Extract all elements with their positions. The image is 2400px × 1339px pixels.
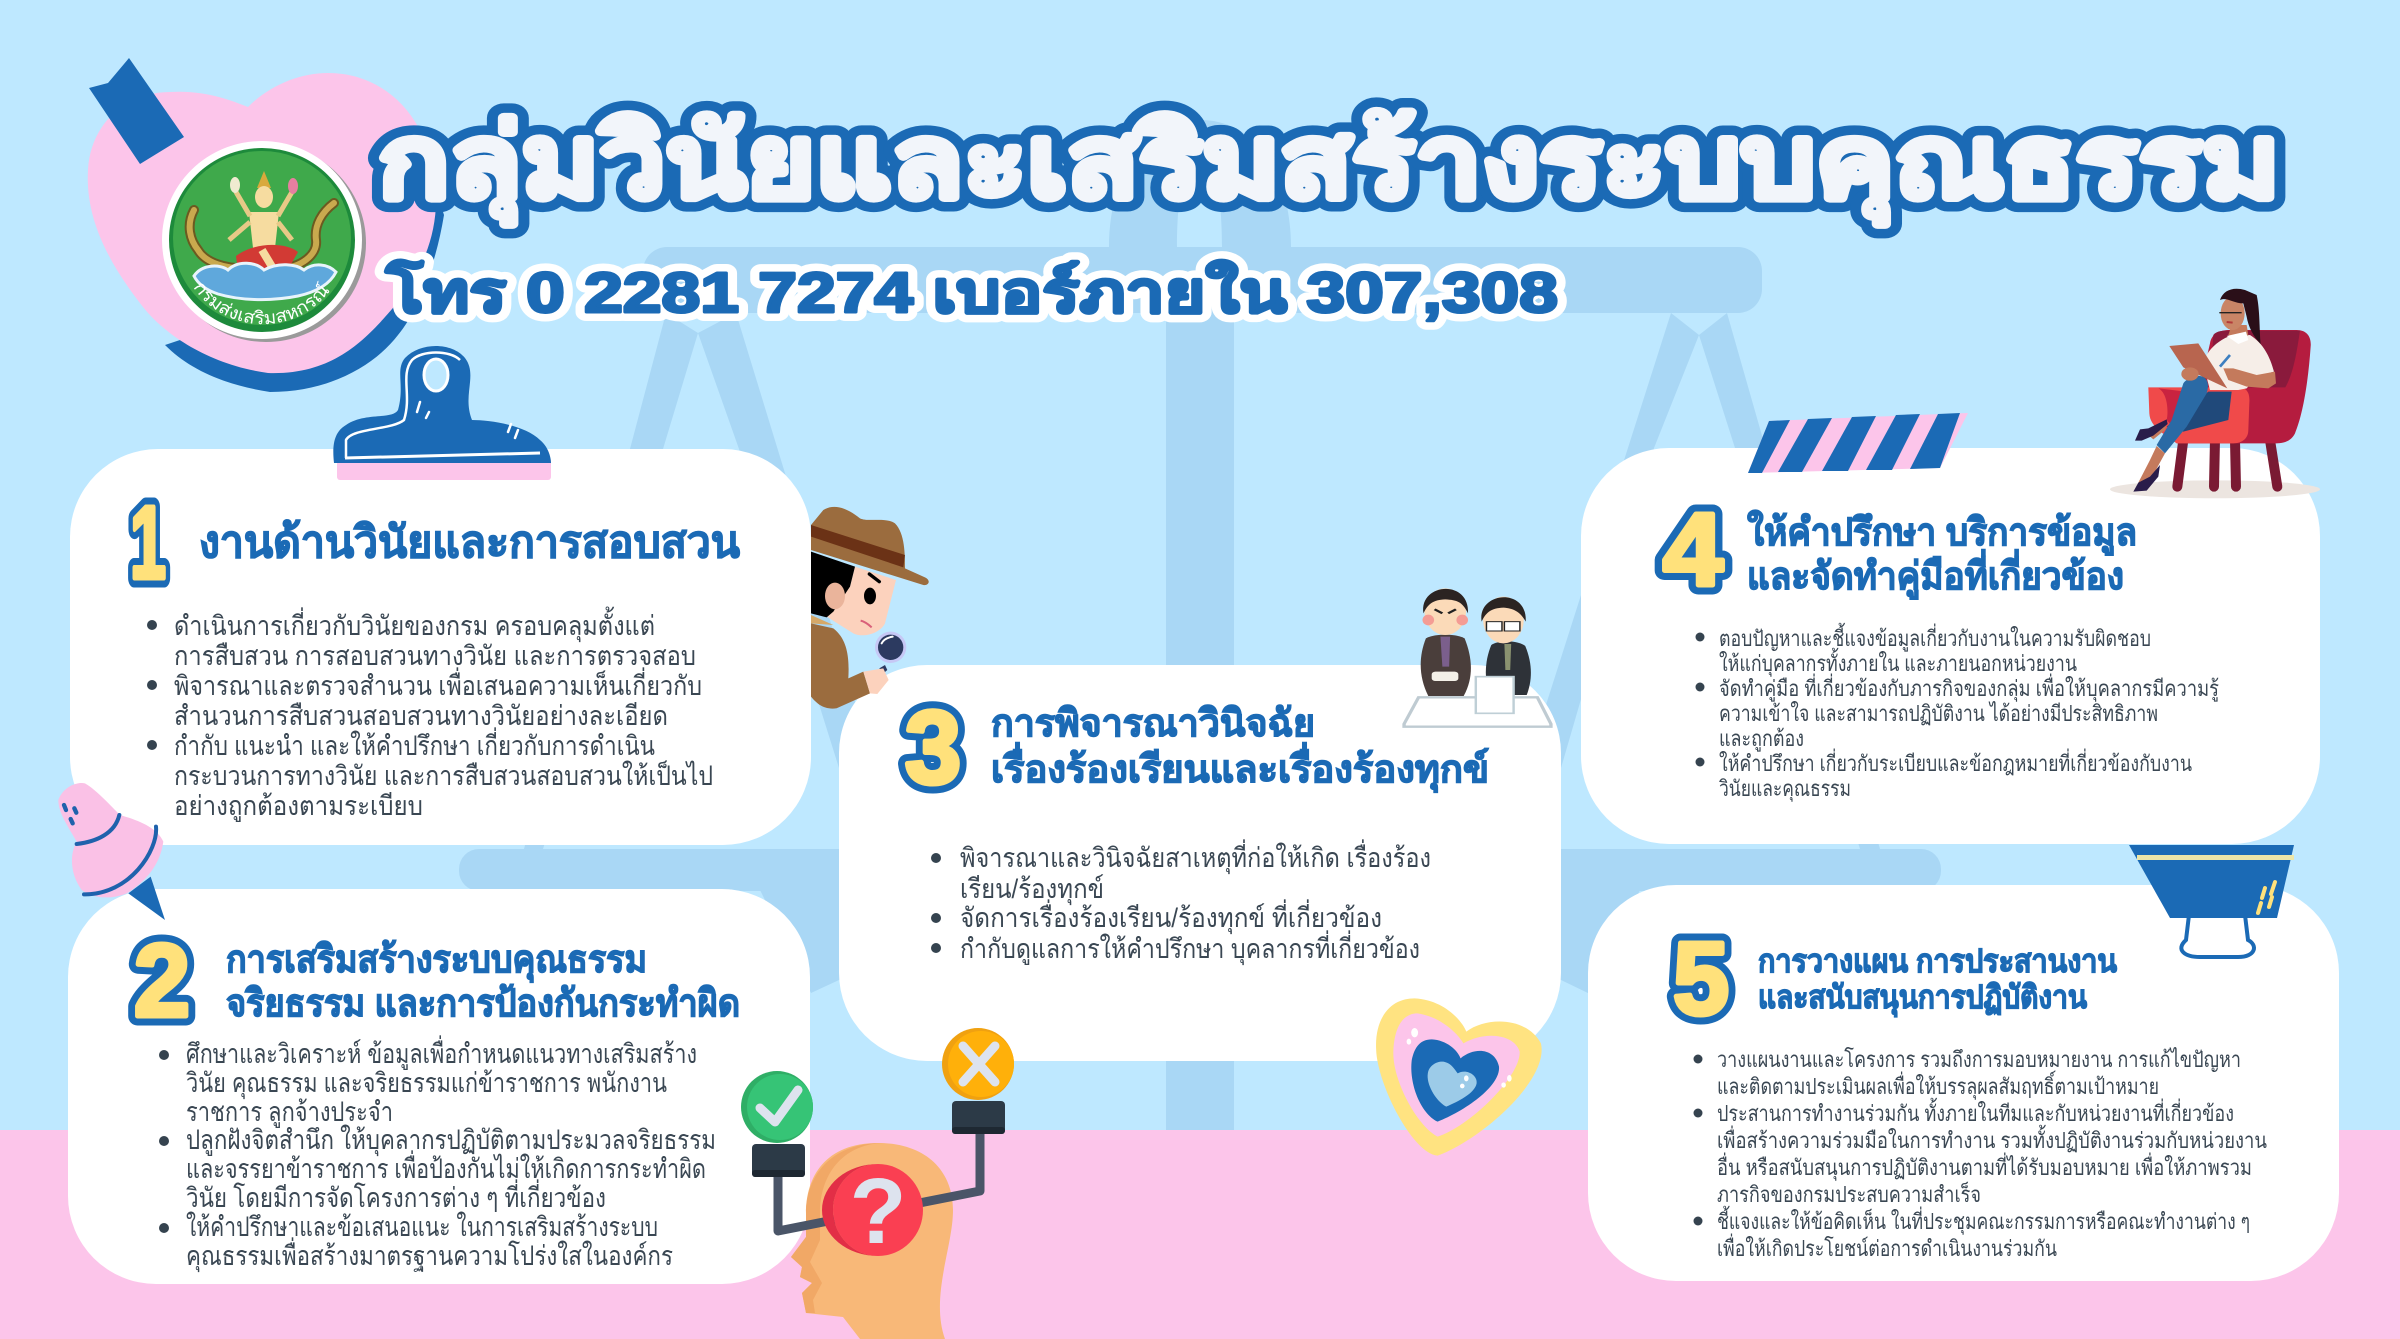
body text 5: อื่น หรือสนับสนุนการปฏิบัติงานตามที่ได้รับมอบหมาย เพื่อให้ภาพรวม	[1717, 1152, 2252, 1181]
icon: clip on panel 1	[333, 346, 551, 480]
body text 3	[931, 839, 1431, 966]
number 5: 5	[1673, 921, 1729, 1036]
body text 5: ประสานการทำงานร่วมกัน ทั้งภายในทีมและกับหน่วยงานที่เกี่ยวข้อง	[1717, 1098, 2234, 1126]
body text 2: ให้คำปรึกษาและข้อเสนอแนะ ในการเสริมสร้างระบบ	[186, 1211, 658, 1242]
check badge	[741, 1071, 813, 1143]
body text 1: ดำเนินการเกี่ยวกับวินัยของกรม ครอบคลุมตั้งแต่	[174, 606, 655, 643]
panel 5: planning	[1588, 885, 2339, 1281]
ballot box	[1476, 677, 1514, 713]
heading 5	[1758, 943, 2117, 1018]
icon: striped tape	[1748, 413, 1968, 473]
icon: layered heart	[1376, 998, 1542, 1156]
body text 3: พิจารณาและวินิจฉัยสาเหตุที่ก่อให้เกิด เรื่องร้อง	[960, 839, 1431, 875]
body text 1: กำกับ แนะนำ และให้คำปรึกษา เกี่ยวกับการดำเนิน	[174, 727, 655, 761]
number 1: 1	[130, 485, 166, 600]
heading 4	[1747, 510, 2137, 600]
number 4: 4	[1663, 492, 1723, 607]
body text 1: การสืบสวน การสอบสวนทางวินัย และการตรวจสอบ	[174, 641, 696, 671]
body text 4: ความเข้าใจ และสามารถปฏิบัติงาน ได้อย่างมีประสิทธิภาพ	[1719, 701, 2158, 726]
heading 4: ให้คำปรึกษา บริการข้อมูล	[1747, 510, 2137, 556]
body text 1: อย่างถูกต้องตามระเบียบ	[174, 791, 423, 822]
body text 2: วินัย คุณธรรม และจริยธรรมแก่ข้าราชการ พนักงาน	[186, 1068, 667, 1100]
heading 2	[226, 939, 740, 1025]
body text 3: เรียน/ร้องทุกข์	[960, 873, 1104, 906]
body text 4: ตอบปัญหาและชี้แจงข้อมูลเกี่ยวกับงานในความรับผิดชอบ	[1719, 623, 2151, 652]
department logo emblem: กรมส่งเสริมสหกรณ์	[194, 280, 330, 324]
body text 4: ให้แก่บุคลากรทั้งภายใน และภายนอกหน่วยงาน	[1719, 648, 2077, 677]
number 4: 4	[1663, 492, 1723, 607]
body text 5: และติดตามประเมินผลเพื่อให้บรรลุผลสัมฤทธิ์ตามเป้าหมาย	[1717, 1071, 2159, 1100]
subtitle phone: โทร 0 2281 7274 เบอร์ภายใน 307,308	[385, 258, 1558, 325]
clouds	[194, 263, 336, 300]
heading 5: และสนับสนุนการปฏิบัติงาน	[1758, 979, 2087, 1018]
number 3: 3	[905, 690, 961, 805]
official right	[1481, 597, 1531, 695]
body text 3: จัดการเรื่องร้องเรียน/ร้องทุกข์ ที่เกี่ยวข้อง	[960, 899, 1382, 935]
body text 2: และจรรยาข้าราชการ เพื่อป้องกันไม่ให้เกิดการกระทำผิด	[186, 1150, 706, 1184]
heading 3: เรื่องร้องเรียนและเรื่องร้องทุกข์	[991, 742, 1489, 793]
heading 1: งานด้านวินัยและการสอบสวน	[199, 518, 740, 567]
body text 5: ชี้แจงและให้ข้อคิดเห็น ในที่ประชุมคณะกรรมการหรือคณะทำงานต่าง ๆ	[1717, 1206, 2250, 1235]
woman body	[2133, 289, 2276, 492]
body text 1: พิจารณาและตรวจสำนวน เพื่อเสนอความเห็นเกี่ยวกับ	[174, 667, 702, 701]
panel 2: ethics promotion	[68, 889, 810, 1284]
number 3: 3	[905, 690, 961, 805]
serpents	[190, 203, 334, 268]
number 1	[130, 485, 166, 600]
heading 5: การวางแผน การประสานงาน	[1758, 943, 2117, 979]
body text 5	[1694, 1047, 2267, 1261]
body text 2: วินัย โดยมีการจัดโครงการต่าง ๆ ที่เกี่ยวข้อง	[186, 1179, 606, 1213]
number 2: 2	[134, 923, 190, 1038]
body text 5: เพื่อสร้างความร่วมมือในการทำงาน รวมทั้งปฏิบัติงานร่วมกับหน่วยงาน	[1717, 1125, 2267, 1153]
body text 4: วินัยและคุณธรรม	[1718, 776, 1851, 802]
body text 2: ราชการ ลูกจ้างประจำ	[186, 1097, 393, 1128]
chair	[2148, 330, 2311, 443]
body text 2	[159, 1035, 716, 1273]
panel 1: disciplinary work	[70, 449, 811, 845]
body text 1: สำนวนการสืบสวนสอบสวนทางวินัยอย่างละเอียด	[174, 701, 668, 731]
title: กลุ่มวินัยและเสริมสร้างระบบคุณธรรม	[378, 105, 2280, 226]
deity figure	[229, 171, 298, 284]
official left	[1421, 588, 1471, 696]
subtitle phone: โทร 0 2281 7274 เบอร์ภายใน 307,308	[385, 258, 1558, 325]
body text 5: ภารกิจของกรมประสบความสำเร็จ	[1717, 1180, 1981, 1207]
body text 4: และถูกต้อง	[1719, 726, 1804, 752]
department logo emblem	[162, 141, 366, 342]
icon: push pin	[58, 783, 165, 920]
heading 3: การพิจารณาวินิจฉัย	[991, 703, 1315, 745]
body text 5: วางแผนงานและโครงการ รวมถึงการมอบหมายงาน การแก้ไขปัญหา	[1717, 1047, 2241, 1072]
body text 1	[147, 606, 713, 822]
panel 3: complaints	[839, 665, 1561, 1061]
logo heart with tape	[88, 58, 444, 392]
number 2: 2	[134, 923, 190, 1038]
icon: two officials at a ballot box	[1404, 588, 1551, 727]
cross badge	[942, 1028, 1014, 1100]
number 1: 1	[130, 485, 166, 600]
panel 4: consulting	[1581, 448, 2320, 844]
heading 2: การเสริมสร้างระบบคุณธรรม	[226, 939, 647, 983]
body text 4: ให้คำปรึกษา เกี่ยวกับระเบียบและข้อกฎหมายที่เกี่ยวข้องกับงาน	[1719, 748, 2192, 776]
heading 3	[991, 703, 1489, 793]
body text 3: กำกับดูแลการให้คำปรึกษา บุคลากรที่เกี่ยวข้อง	[960, 930, 1420, 966]
body text 4: จัดทำคู่มือ ที่เกี่ยวข้องกับภารกิจของกลุ่ม เพื่อให้บุคลากรมีความรู้	[1719, 673, 2219, 702]
body text 2: ปลูกฝังจิตสำนึก ให้บุคลากรปฏิบัติตามประมวลจริยธรรม	[186, 1124, 716, 1157]
body text 5: เพื่อให้เกิดประโยชน์ต่อการดำเนินงานร่วมกัน	[1717, 1233, 2057, 1261]
heading 2: จริยธรรม และการป้องกันกระทำผิด	[226, 983, 740, 1025]
body text 2: คุณธรรมเพื่อสร้างมาตรฐานความโปร่งใสในองค์กร	[186, 1237, 673, 1273]
icon: binder clip on panel 5	[2129, 845, 2294, 957]
chair legs	[2177, 440, 2277, 487]
icon: woman in armchair	[2110, 289, 2320, 498]
background balance scale	[459, 120, 1941, 1130]
number 5: 5	[1673, 921, 1729, 1036]
icon: head with decision question	[741, 1028, 1014, 1339]
body text 1: กระบวนการทางวินัย และการสืบสวนสอบสวนให้เป็นไป	[174, 758, 713, 791]
body text 4	[1696, 623, 2219, 802]
question mark: ?	[850, 1159, 906, 1263]
icon: detective	[811, 507, 929, 709]
title: กลุ่มวินัยและเสริมสร้างระบบคุณธรรม	[378, 105, 2280, 226]
heading 4: และจัดทำคู่มือที่เกี่ยวข้อง	[1747, 549, 2124, 600]
body text 2: ศึกษาและวิเคราะห์ ข้อมูลเพื่อกำหนดแนวทางเสริมสร้าง	[186, 1035, 697, 1070]
